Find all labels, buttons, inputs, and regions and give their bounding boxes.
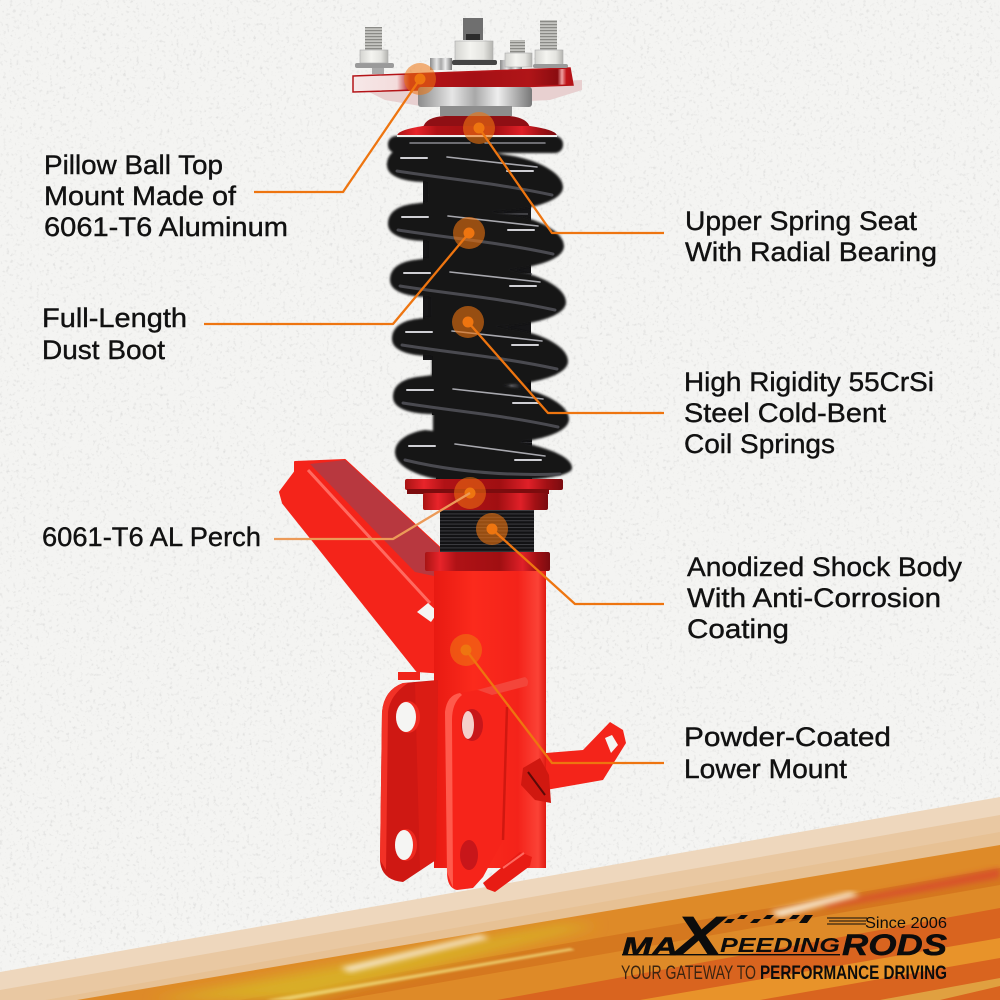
logo checker flag (724, 915, 813, 923)
logo rods: RODS (842, 929, 947, 962)
anodized collars and perch (405, 479, 563, 571)
coil springs (387, 136, 572, 482)
logo peeding: PEEDING (720, 935, 840, 957)
bottom diagonal orange band (0, 780, 1000, 1000)
since 2006: Since 2006 (865, 915, 947, 932)
label: lower mount: Powder-Coated (684, 722, 891, 752)
label: coil springs: Coil Springs (684, 429, 835, 459)
label: lower mount: Lower Mount (684, 754, 848, 784)
callout: pillow ball top mount (254, 63, 436, 192)
logo: maXpeedingRods (621, 904, 947, 984)
logo large X: X (670, 904, 729, 967)
tagline: YOUR GATEWAY TO (621, 963, 756, 984)
label: shock body: Anodized Shock Body (687, 552, 963, 582)
label: dust boot: Full-Length (42, 303, 187, 333)
callout: upper spring seat (463, 112, 664, 233)
label: pillow ball top mount: Pillow Ball Top (44, 150, 223, 180)
tagline: PERFORMANCE DRIVING (760, 963, 947, 984)
coil highlights (397, 143, 560, 474)
label: perch: 6061-T6 AL Perch (42, 522, 261, 552)
side bracket with tab (521, 722, 626, 803)
callout lines and markers (204, 63, 664, 763)
label: upper spring seat: With Radial Bearing (685, 237, 937, 267)
threaded body (440, 508, 534, 553)
label: upper spring seat: Upper Spring Seat (685, 206, 918, 236)
inner shaft and dust boot (423, 170, 534, 480)
shock absorber illustration (280, 18, 626, 892)
left mounting bracket (380, 672, 438, 882)
label: shock body: With Anti-Corrosion (687, 583, 941, 613)
top mount (353, 18, 582, 116)
label: dust boot: Dust Boot (42, 335, 166, 365)
label: coil springs: Steel Cold-Bent (684, 398, 887, 428)
label: shock body: Coating (687, 614, 789, 644)
logo underline (622, 954, 840, 955)
callout: dust boot (204, 217, 485, 324)
label: pillow ball top mount: Mount Made of (44, 181, 237, 211)
callout: shock body (476, 513, 664, 604)
lever arm (280, 460, 447, 673)
logo speed lines (827, 918, 867, 924)
callout: lower mount (450, 634, 664, 763)
callout: coil springs (452, 306, 664, 413)
logo wordmark left: MA (622, 933, 678, 961)
strut body (434, 570, 546, 868)
upper spring seat (397, 116, 557, 137)
label: pillow ball top mount: 6061-T6 Aluminum (44, 212, 288, 242)
callout: perch (274, 477, 486, 539)
right mounting bracket (445, 677, 532, 892)
label: coil springs: High Rigidity 55CrSi (684, 367, 934, 397)
